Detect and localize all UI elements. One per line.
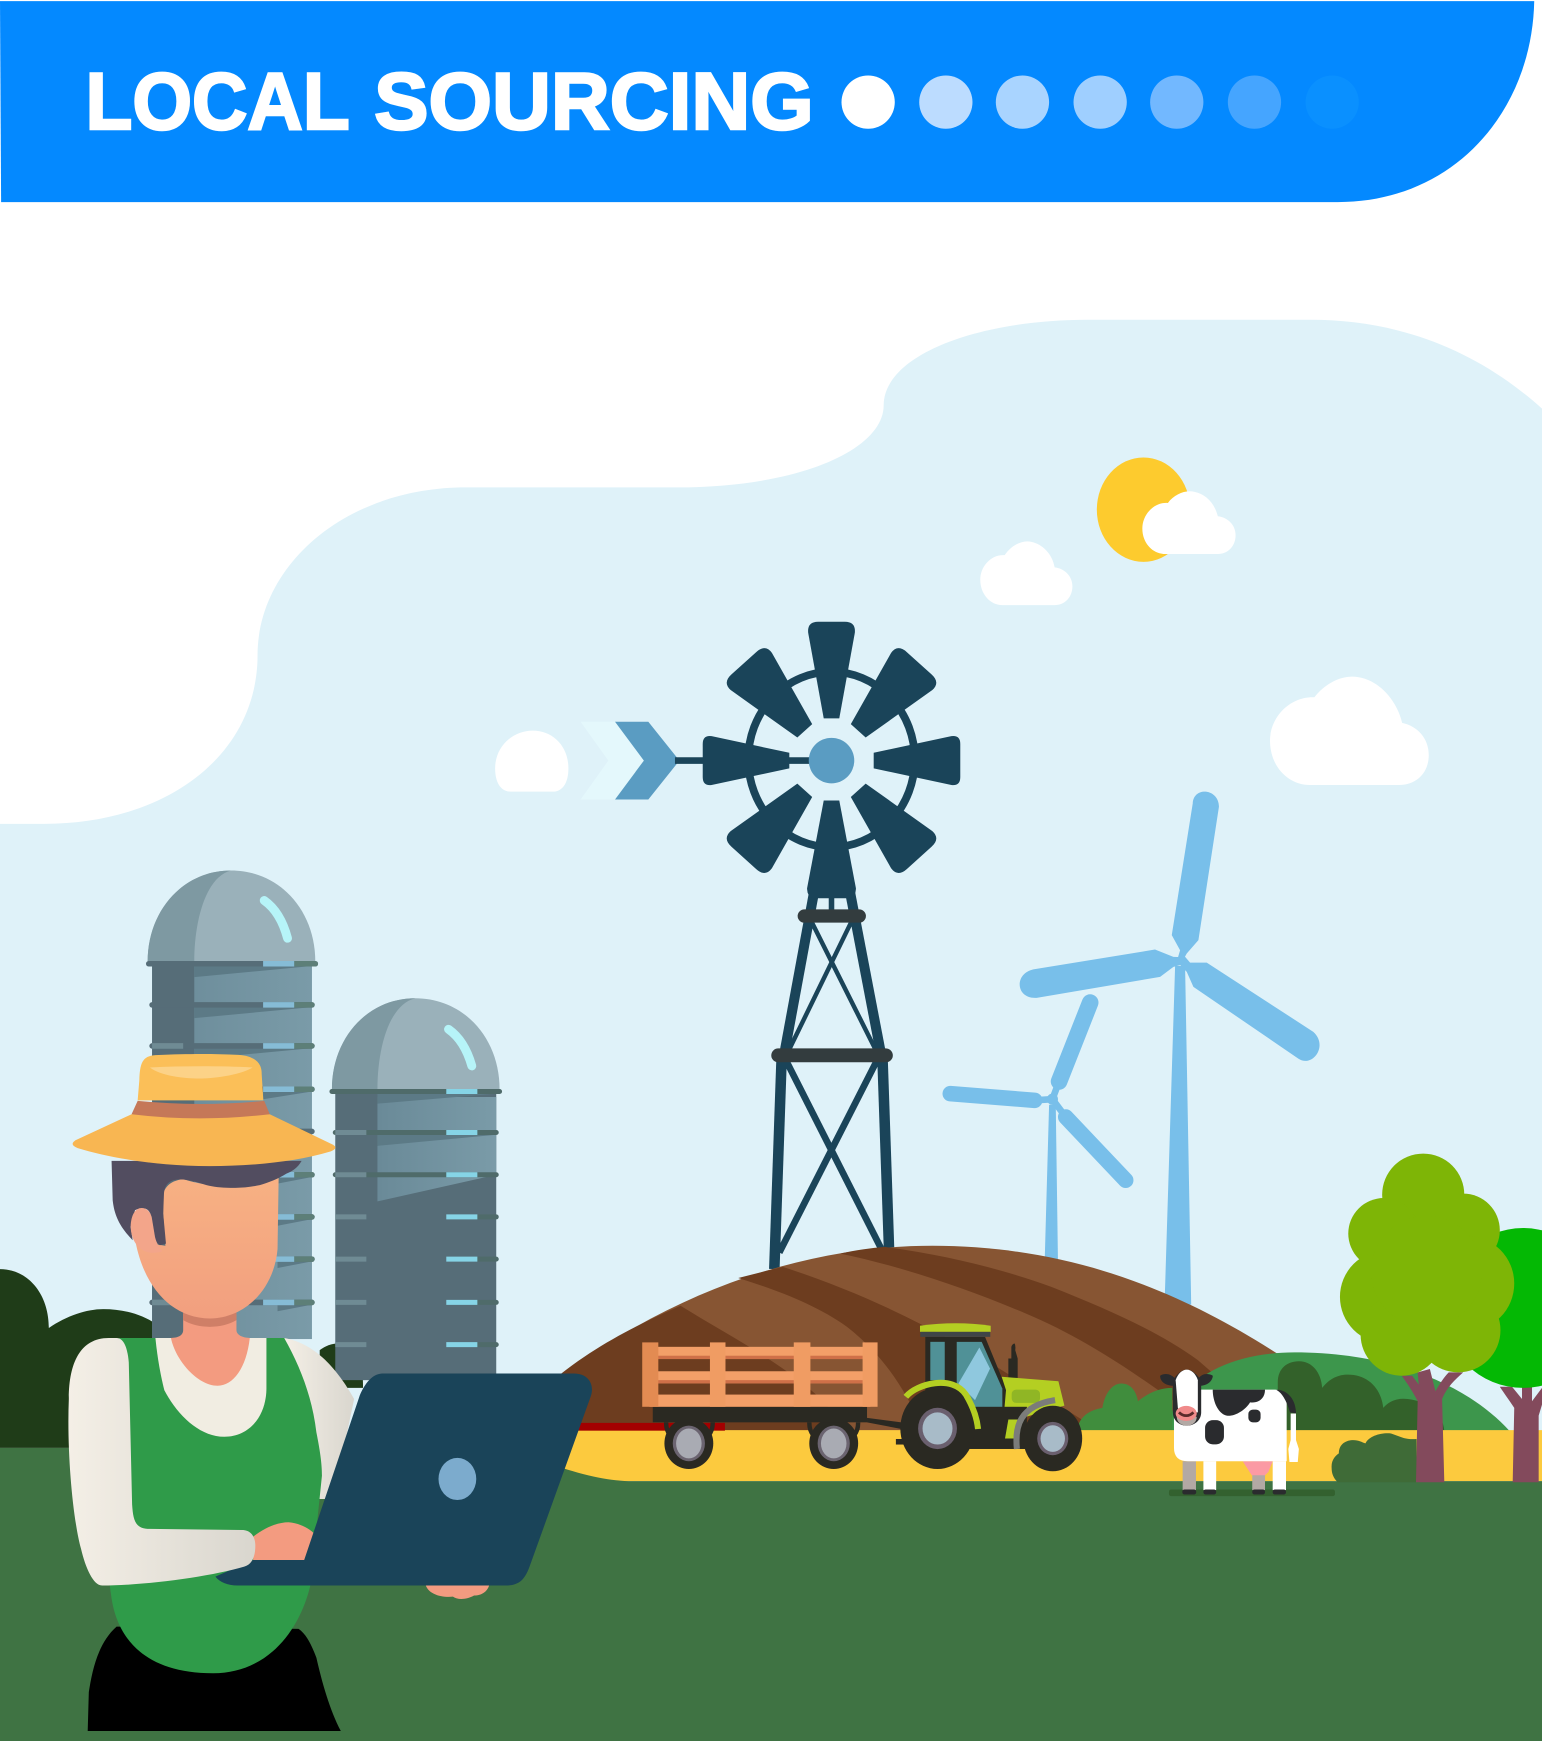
laptop logo bbox=[439, 1458, 476, 1500]
silo back highlight bbox=[264, 900, 288, 938]
farmer shirt collar bbox=[155, 1338, 266, 1437]
blade left bbox=[1020, 950, 1181, 998]
windmill blades bbox=[703, 622, 960, 898]
farmer trousers bbox=[88, 1627, 341, 1731]
tractor rear wheel bbox=[900, 1388, 975, 1469]
cow spots bbox=[1205, 1390, 1296, 1444]
farmer upper hand bbox=[253, 1522, 315, 1563]
windmill bbox=[581, 622, 960, 1269]
tractor cab bbox=[925, 1337, 1007, 1412]
trailer wheels bbox=[664, 1418, 858, 1469]
wind turbine large bbox=[1020, 792, 1320, 1305]
trailer bed bbox=[653, 1407, 867, 1422]
windmill tower bbox=[774, 894, 889, 1269]
farmer hat bbox=[73, 1054, 335, 1166]
silo back body bbox=[152, 962, 312, 1339]
windmill hub bbox=[809, 738, 854, 783]
ground bbox=[0, 1448, 1542, 1741]
tractor hood bbox=[1002, 1377, 1064, 1418]
cow bbox=[1160, 1370, 1335, 1496]
silo back bbox=[148, 870, 315, 1339]
trailer posts bbox=[642, 1342, 878, 1407]
blade right bbox=[1177, 955, 1320, 1061]
cow tail bbox=[1288, 1413, 1299, 1462]
tree right bbox=[1443, 1228, 1542, 1482]
windmill ring bbox=[748, 672, 915, 847]
cloud near sun bbox=[1142, 491, 1236, 554]
progress dots bbox=[841, 76, 1359, 129]
tree big bbox=[1340, 1154, 1514, 1482]
farmer lower hand bbox=[425, 1583, 490, 1599]
cloud right bbox=[1270, 677, 1429, 785]
dark bushes left bbox=[0, 1269, 155, 1448]
bush front bbox=[1332, 1433, 1417, 1482]
farmer face bbox=[135, 1178, 279, 1319]
farmer hair bbox=[112, 1161, 302, 1245]
cow legs bbox=[1182, 1461, 1286, 1495]
farmer far shoulder bbox=[284, 1338, 354, 1499]
tractor fenders bbox=[906, 1383, 978, 1429]
cow head bbox=[1160, 1370, 1213, 1426]
tractor front wheel bbox=[1023, 1406, 1082, 1471]
ploughed hill bbox=[544, 1246, 1332, 1432]
cow shadow bbox=[1169, 1490, 1335, 1496]
dark bush behind arm bbox=[320, 1343, 363, 1388]
laptop bbox=[215, 1373, 592, 1586]
farmer sleeve bbox=[68, 1338, 255, 1586]
silo front dome bbox=[332, 998, 500, 1089]
cloud middle bbox=[980, 541, 1072, 605]
farmer ear bbox=[131, 1208, 162, 1253]
silo front bbox=[332, 998, 500, 1380]
title: LOCAL bbox=[85, 57, 350, 147]
trailer bbox=[642, 1342, 901, 1469]
tractor exhaust bbox=[1008, 1344, 1018, 1378]
silo back rings bbox=[149, 964, 315, 1302]
farmer neck bbox=[171, 1314, 250, 1386]
cow udder bbox=[1243, 1461, 1273, 1475]
silo front highlight bbox=[449, 1029, 472, 1066]
road bbox=[555, 1430, 1542, 1481]
windmill tail vane bbox=[581, 722, 816, 799]
silo front rings bbox=[332, 1091, 500, 1345]
trailer forks bbox=[666, 1422, 858, 1439]
tractor chassis bbox=[966, 1407, 1027, 1449]
sun bbox=[1097, 457, 1190, 562]
silo front body bbox=[335, 1089, 496, 1380]
farmer vest bbox=[102, 1338, 322, 1673]
wind turbine small bbox=[950, 1003, 1126, 1262]
red strip bbox=[566, 1423, 725, 1431]
trailer rails bbox=[649, 1347, 870, 1407]
cloud left bbox=[495, 731, 568, 792]
silo back dome bbox=[148, 870, 315, 962]
tractor bbox=[896, 1323, 1082, 1471]
blade up bbox=[1172, 792, 1219, 962]
farmer bbox=[68, 1054, 592, 1731]
green hill and bushes bbox=[1077, 1352, 1510, 1431]
title: SOURCING bbox=[374, 57, 814, 147]
cow body bbox=[1174, 1390, 1287, 1461]
header banner bbox=[0, 1, 1534, 202]
